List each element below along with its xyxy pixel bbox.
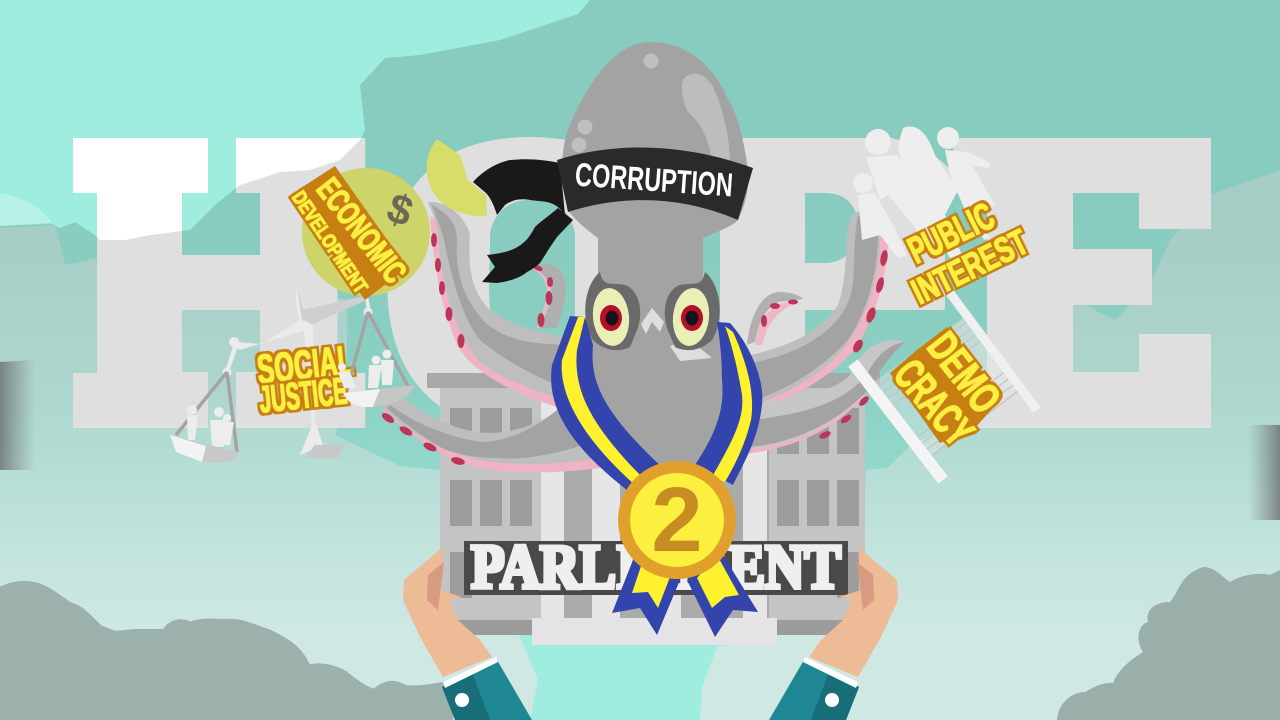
edge vignettes <box>0 360 1280 520</box>
left eye <box>585 272 640 350</box>
ladder <box>853 293 1037 480</box>
social justice label: JUSTICE <box>257 371 349 421</box>
democracy label: DEMO <box>917 323 1010 423</box>
eyes <box>585 272 720 350</box>
coin: $ <box>381 183 419 236</box>
family of people <box>853 127 995 258</box>
arm lower right <box>735 340 905 455</box>
bottom-left grey cloud <box>0 584 450 720</box>
octopus head and body <box>562 42 748 480</box>
arm lower left <box>380 393 610 472</box>
parliament label: PARLIAMENT <box>471 531 841 602</box>
ribbon tails <box>612 550 758 637</box>
left hand <box>403 547 532 720</box>
small back tentacle right <box>747 292 803 345</box>
octopus arms <box>380 202 905 472</box>
title letters: HOPE: H <box>87 75 343 485</box>
bottom-right grey cloud <box>1057 567 1280 720</box>
pale cloud top left <box>0 193 52 226</box>
right eye <box>665 272 720 350</box>
democracy label: CRACY <box>884 350 983 455</box>
right fog cloud <box>700 170 1280 720</box>
banana piece <box>427 139 487 216</box>
parliament building <box>427 373 880 645</box>
social justice label <box>255 336 355 421</box>
public interest label: INTEREST <box>905 221 1034 312</box>
suckers <box>380 233 889 466</box>
medal <box>618 461 736 579</box>
economic development label <box>287 166 414 300</box>
title letters: HOPE: P <box>712 76 952 486</box>
medal: 2 <box>651 469 703 571</box>
economic development label: ECONOMIC <box>309 171 414 290</box>
economic development label: DEVELOPMENT <box>287 187 371 298</box>
left fog cloud <box>0 225 538 720</box>
right hand <box>769 547 898 720</box>
social justice label: SOCIAL <box>255 336 355 393</box>
public interest label: PUBLIC <box>902 195 1001 273</box>
justice statue <box>222 285 372 458</box>
medal ribbon <box>551 316 762 500</box>
arm upper left <box>428 202 595 415</box>
scale pans and people <box>170 312 415 463</box>
title letters: HOPE <box>73 137 1211 428</box>
coin <box>302 168 430 296</box>
bandana: CORRUPTION <box>574 156 734 203</box>
bandana <box>473 148 753 283</box>
small back tentacle left <box>530 264 566 328</box>
democracy label <box>884 323 1010 455</box>
arm upper right <box>735 205 888 412</box>
title letters: HOPE: O <box>392 76 668 486</box>
title letters: HOPE: E <box>981 75 1220 485</box>
